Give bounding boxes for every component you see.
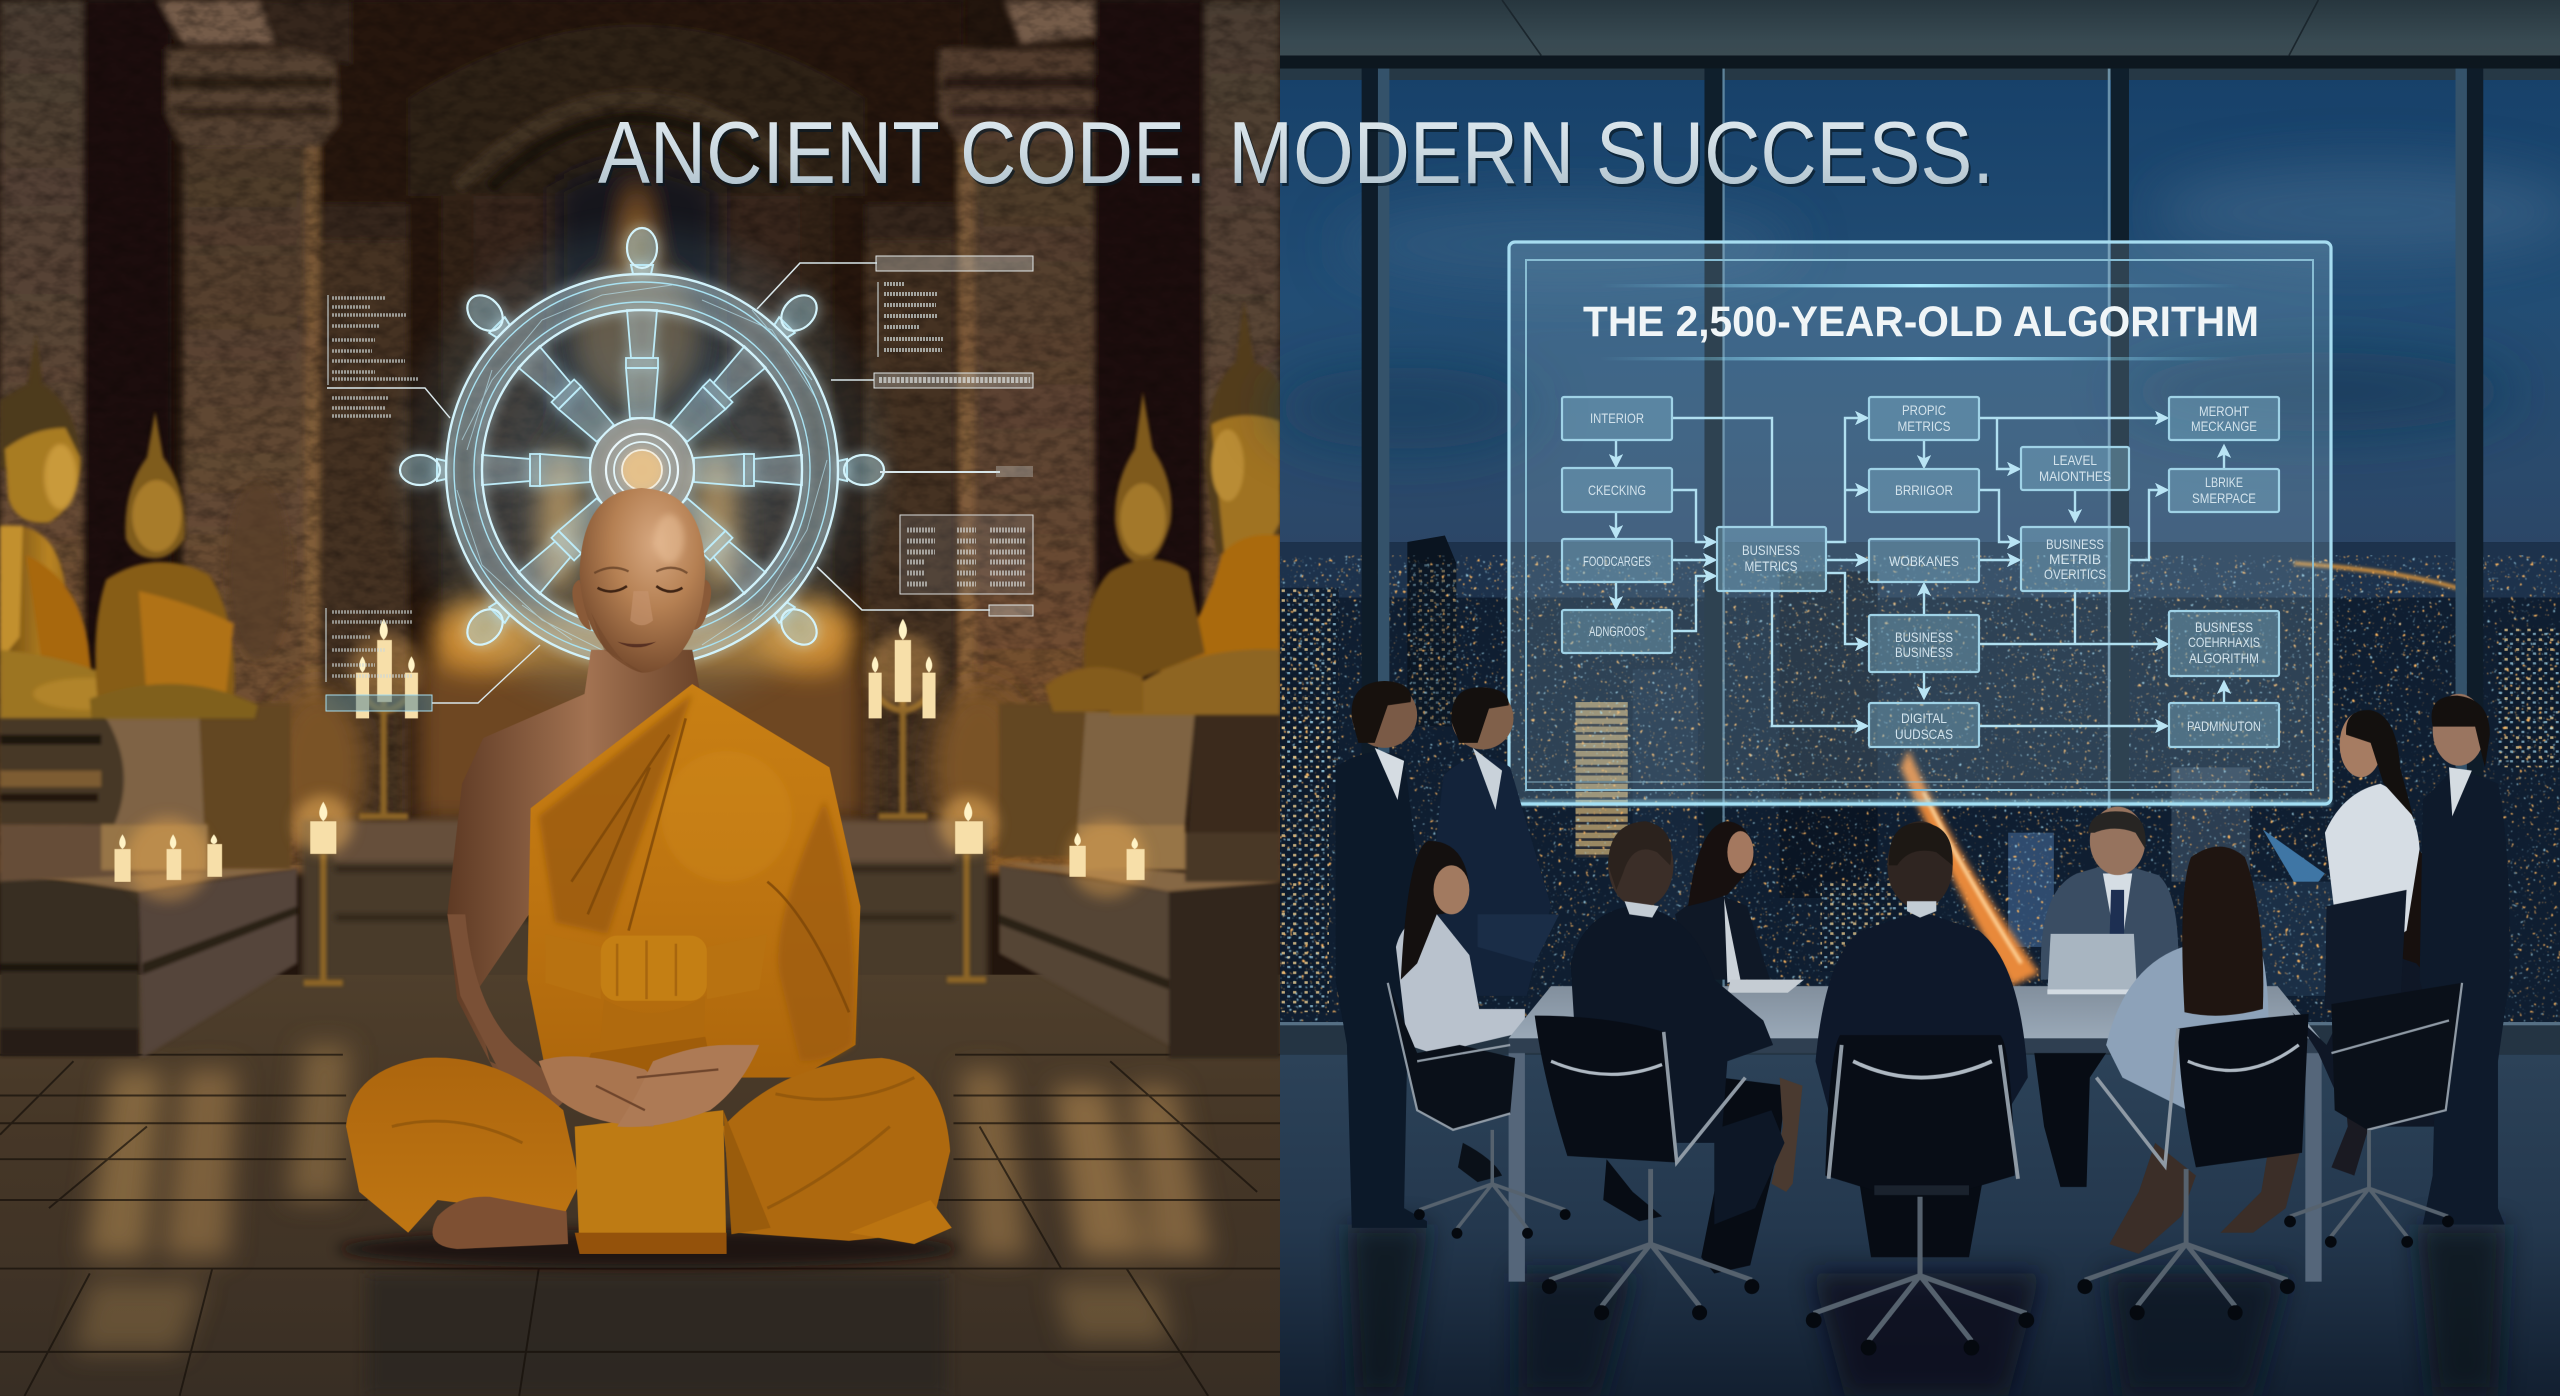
- flowchart labels: ALGORITHM: [2189, 650, 2259, 666]
- flowchart connectors: [1616, 418, 2224, 726]
- conference table: [1509, 980, 2322, 1282]
- temple architecture: [0, 0, 1280, 882]
- callout: wheel axis: [880, 466, 1033, 477]
- flowchart labels: METRICS: [1898, 418, 1950, 434]
- callout: top right: [757, 256, 1033, 357]
- glow behind monk: [487, 313, 797, 624]
- right photo: boardroom backdrop: [1273, 0, 2560, 1396]
- hologram data callouts: [326, 256, 1033, 711]
- office chairs: [1388, 983, 2462, 1355]
- flowchart labels: PADMINUTON: [2187, 718, 2261, 734]
- main title: ANCIENT CODE. MODERN SUCCESS.: [600, 106, 1996, 205]
- floor reflections: [73, 1045, 1211, 1352]
- panel: holographic algorithm flowchart: [1509, 242, 2331, 806]
- left statues: [0, 335, 289, 718]
- blurred background buddha: [269, 163, 1029, 849]
- callout: data table: [900, 515, 1033, 594]
- stone texture overlay: [0, 0, 1280, 865]
- flowchart labels: MAIONTHES: [2039, 468, 2111, 484]
- flowchart labels: PROPIC: [1902, 402, 1946, 418]
- upper robe: [527, 684, 860, 1102]
- panel heading: THE 2,500-YEAR-OLD ALGORITHM: [1583, 298, 2259, 346]
- man seen from behind at left: [1571, 821, 1784, 1224]
- right statues: [1045, 302, 1280, 715]
- ceiling: [1280, 0, 2560, 80]
- callout: upper left text: [328, 295, 418, 385]
- monk: [338, 488, 958, 1269]
- hologram: dharma wheel: [400, 228, 884, 712]
- flowchart labels: OVERITICS: [2044, 566, 2106, 582]
- flowchart labels: CKECKING: [1588, 482, 1646, 498]
- window mullions: [1362, 69, 2483, 1032]
- flowchart boxes: [1562, 397, 2279, 747]
- flowchart labels: UUDSCAS: [1895, 726, 1953, 742]
- flowchart labels: SMERPACE: [2192, 490, 2256, 506]
- callout: middle right: [831, 373, 1033, 388]
- centre drape: [575, 1110, 727, 1254]
- foot: [432, 1197, 568, 1249]
- callout: middle left text: [327, 388, 450, 418]
- monk shadow: [338, 1229, 958, 1269]
- woman with long hair at right: [2106, 847, 2268, 1110]
- laptop: [2047, 934, 2139, 994]
- sill and floor: [1280, 1022, 2560, 1396]
- left plinths and pedestals: [0, 704, 291, 882]
- flowchart labels: WOBKANES: [1889, 553, 1959, 569]
- city skyline: [1280, 536, 2560, 1029]
- flowchart labels: BUSINESS: [2046, 536, 2104, 552]
- flowchart labels: FOODCARGES: [1583, 553, 1651, 569]
- hands: [539, 1045, 759, 1127]
- flowchart labels: METRIB: [2049, 551, 2101, 567]
- flowchart labels: BUSINESS: [1742, 542, 1800, 558]
- flowchart labels: MEROHT: [2199, 403, 2249, 419]
- presenting man at head of table: [2041, 807, 2178, 980]
- standing man at far right: [2420, 694, 2510, 1224]
- flowchart labels: METRICS: [1744, 558, 1798, 574]
- floor: [0, 975, 1280, 1396]
- seated woman in dark suit at right: [2292, 842, 2457, 1127]
- flowchart labels: COEHRHAXIS: [2188, 634, 2260, 650]
- monk neck and bare shoulder: [447, 650, 702, 1097]
- woman at far side of the table: [1675, 821, 1770, 983]
- standing woman with tablet: [2263, 710, 2420, 1176]
- glowing road: [1900, 563, 2482, 986]
- main title foreground: ANCIENT CODE. MODERN SUCCESS.: [598, 103, 1994, 202]
- callout: lower right: [817, 567, 1033, 616]
- boardroom people and furniture: [1336, 681, 2510, 1396]
- seated woman in white shirt: [1396, 841, 1525, 1055]
- back steps: [302, 820, 988, 980]
- right plinths and pedestals: [999, 704, 1280, 882]
- crossed legs: [346, 1058, 952, 1254]
- flowchart labels: BUSINESS: [1895, 644, 1953, 660]
- flowchart labels: LBRIKE: [2205, 474, 2243, 490]
- flowchart labels: DIGITAL: [1901, 710, 1947, 726]
- standing man with crossed arms: [1433, 687, 1559, 1182]
- left arm: [447, 914, 571, 1110]
- callout: lower left text: [326, 608, 540, 711]
- left photo: temple scene: [0, 0, 1280, 1396]
- candle stands and candles: [114, 619, 1146, 983]
- flowchart labels: LEAVEL: [2053, 452, 2097, 468]
- lower legs of seated people: [1603, 1053, 2302, 1273]
- flowchart labels: MECKANGE: [2191, 418, 2257, 434]
- standing man far left: [1336, 681, 1427, 1228]
- flowchart labels: BUSINESS: [1895, 629, 1953, 645]
- flowchart labels: BUSINESS: [2195, 619, 2253, 635]
- left bench: [0, 865, 297, 1058]
- flowchart labels: BRRIIGOR: [1895, 482, 1953, 498]
- flowchart labels: INTERIOR: [1590, 410, 1644, 426]
- head: [572, 488, 711, 673]
- man seen from behind at centre: [1816, 821, 2028, 1110]
- flowchart labels: ADNGROOS: [1589, 623, 1645, 639]
- floor reflections: [1347, 1224, 2506, 1396]
- right bench: [999, 862, 1280, 1058]
- flowchart labels: [1583, 402, 2261, 742]
- night sky: [1280, 78, 2560, 568]
